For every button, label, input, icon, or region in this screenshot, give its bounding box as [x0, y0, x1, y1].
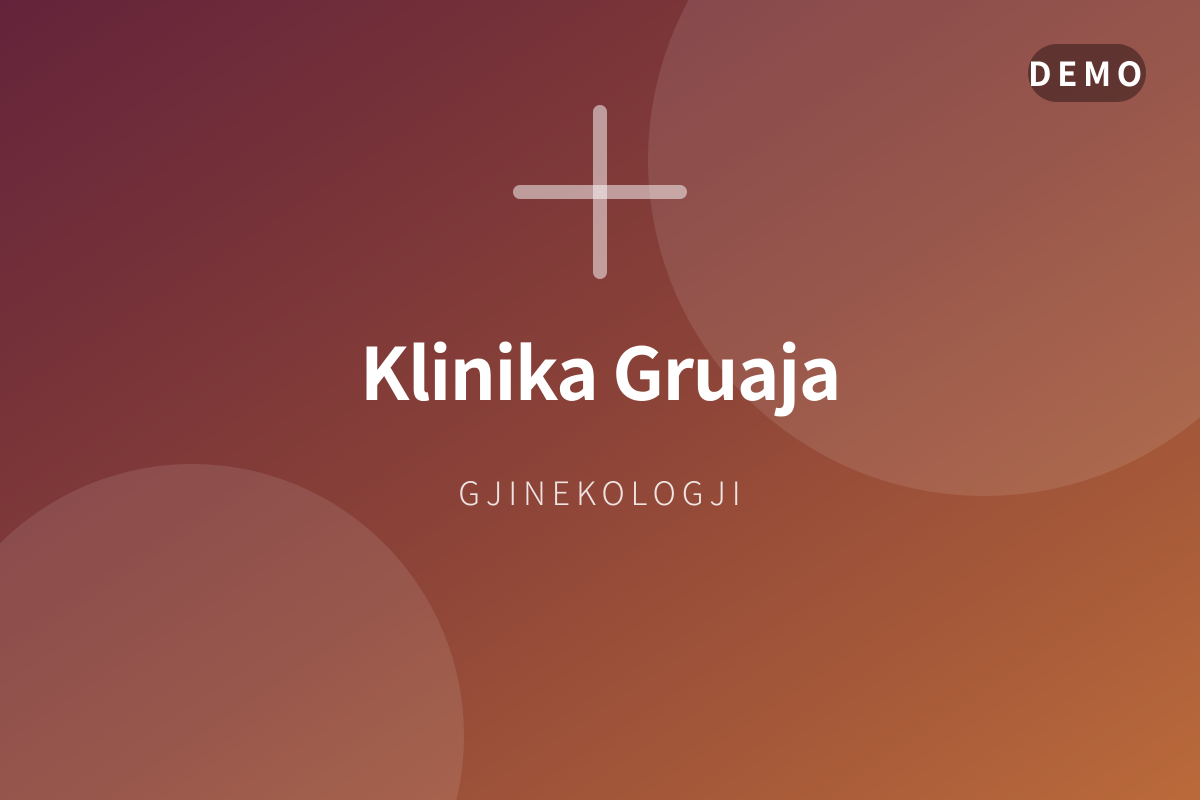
decorative circle: bottom left	[0, 464, 464, 800]
icon: medical cross	[513, 105, 687, 279]
decorative circle: top right	[648, 0, 1200, 496]
title: Klinika Gruaja	[360, 316, 840, 421]
badge: demo: DEMO	[1028, 48, 1148, 96]
subtitle: GJINEKOLOGJI	[458, 469, 747, 515]
